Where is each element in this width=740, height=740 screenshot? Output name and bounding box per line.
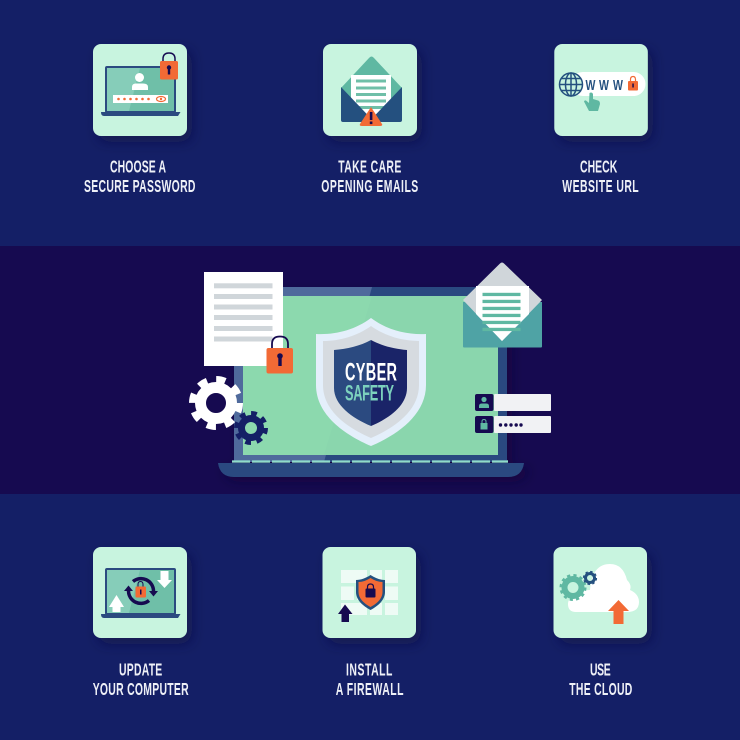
heading: A FIREWALL (336, 680, 404, 700)
icon: browser address bar: WWW (586, 76, 624, 93)
heading: WEBSITE URL (562, 177, 639, 197)
heading: UPDATE (119, 661, 162, 681)
panel: install a firewall (322, 547, 416, 700)
heading: USE (590, 661, 611, 681)
heading: CHECK (580, 158, 618, 178)
heading: SECURE PASSWORD (84, 177, 195, 197)
card background (93, 547, 187, 638)
panel: choose a secure password (84, 44, 195, 197)
panel: update your computer (93, 547, 189, 700)
icon: cloud with gears and upload arrow (561, 564, 639, 624)
heading: YOUR COMPUTER (93, 680, 189, 700)
card background (322, 547, 416, 638)
illustration: laptop with cyber safety shield (192, 262, 551, 477)
shield (316, 318, 426, 446)
heading (84, 158, 195, 197)
icon: padlock (160, 53, 178, 80)
icon: envelope with warning (341, 56, 402, 126)
login field: password (475, 416, 551, 433)
envelope (463, 262, 542, 348)
heading (569, 661, 632, 700)
card background (554, 547, 647, 638)
gear: navy (236, 413, 266, 443)
heading: THE CLOUD (569, 680, 632, 700)
panel: use the cloud (554, 547, 647, 700)
shield: CYBER (345, 360, 397, 387)
card background (93, 44, 187, 136)
heading (336, 661, 404, 700)
icon: laptop with update arrows (101, 568, 180, 618)
shield: SAFETY (345, 381, 394, 406)
document (204, 272, 283, 366)
login field: username (475, 394, 551, 411)
panel: check website url (554, 44, 648, 197)
icon: laptop with password (101, 66, 180, 116)
heading: INSTALL (346, 661, 392, 681)
heading (321, 158, 418, 197)
heading (93, 661, 189, 700)
heading: CHOOSE A (110, 158, 166, 178)
gear: white (192, 380, 240, 426)
icon: browser address bar (559, 72, 646, 111)
panel: central band (0, 246, 740, 494)
panel: take care opening emails (321, 44, 418, 197)
card background (323, 44, 417, 136)
heading: TAKE CARE (338, 158, 401, 178)
heading (562, 158, 639, 197)
card background (554, 44, 648, 136)
heading: OPENING EMAILS (321, 177, 418, 197)
icon: firewall with shield (338, 570, 398, 622)
laptop (218, 287, 524, 477)
padlock (266, 336, 293, 374)
